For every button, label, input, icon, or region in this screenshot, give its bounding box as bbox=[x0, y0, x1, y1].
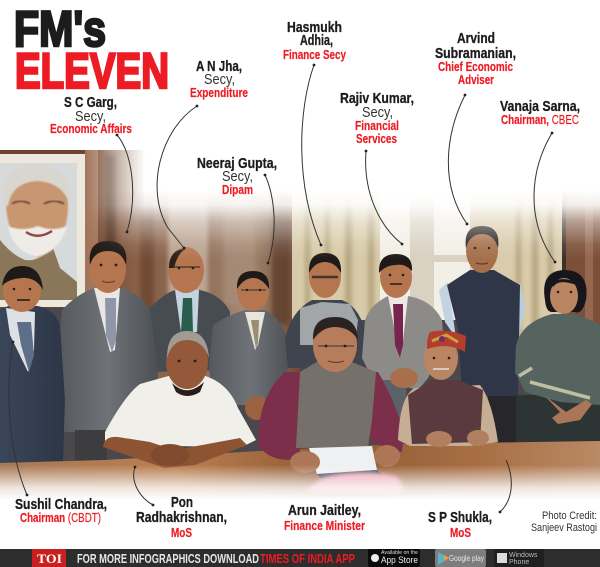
TOI logo bbox=[32, 549, 66, 567]
portrait of Modi bbox=[0, 150, 98, 308]
head bbox=[166, 335, 208, 389]
App Store badge bbox=[368, 549, 420, 567]
scarf bbox=[515, 314, 600, 405]
label: Rajiv Kumar: Services bbox=[356, 131, 397, 146]
label: Pon Radhakrishnan: MoS bbox=[171, 525, 192, 540]
Windows Phone badge: Windows bbox=[509, 552, 538, 559]
label: Arvind Subramanian: Subramanian, bbox=[435, 46, 516, 62]
fade bottom bbox=[0, 465, 600, 500]
flowers bbox=[307, 472, 403, 492]
hair bbox=[544, 270, 587, 312]
footer message: FOR MORE INFOGRAPHICS DOWNLOAD bbox=[77, 551, 259, 566]
label: Arvind Subramanian: Chief Economic bbox=[438, 59, 513, 74]
label: Sushil Chandra bbox=[15, 497, 107, 525]
document bbox=[309, 446, 377, 474]
label: S P Shukla bbox=[428, 510, 492, 540]
shirt bbox=[105, 375, 256, 447]
vest bbox=[296, 360, 376, 448]
trousers bbox=[488, 390, 518, 444]
face bbox=[6, 168, 68, 258]
label: S C Garg bbox=[50, 95, 132, 136]
wood wall left bbox=[85, 150, 300, 380]
wood panel stripes bbox=[106, 155, 290, 365]
smile bbox=[26, 231, 52, 236]
label: Rajiv Kumar: Secy, bbox=[362, 105, 393, 121]
fade top bbox=[88, 150, 600, 254]
label: Arun Jaitley: Arun Jaitley, bbox=[288, 503, 361, 519]
Hasmukh Adhia bbox=[285, 253, 367, 368]
tie bbox=[181, 298, 193, 332]
stripes bbox=[519, 368, 590, 398]
forearms bbox=[103, 437, 247, 468]
curtain centre-left bbox=[292, 150, 382, 320]
App Store badge: App Store bbox=[381, 555, 418, 565]
window bbox=[380, 150, 470, 320]
cap bbox=[427, 331, 466, 352]
label: Vanaja Sarna bbox=[500, 99, 580, 127]
frame bbox=[0, 150, 98, 308]
label: Arvind Subramanian bbox=[435, 31, 516, 87]
arms bbox=[544, 395, 592, 424]
TOI logo: TOI bbox=[37, 551, 62, 566]
label: Hasmukh Adhia: Adhia, bbox=[300, 33, 333, 49]
shirt and tie bbox=[6, 308, 35, 372]
label: S P Shukla: MoS bbox=[450, 525, 471, 540]
white hair bbox=[3, 164, 70, 206]
label: Hasmukh Adhia: Finance Secy bbox=[283, 47, 347, 62]
label: A N Jha: A N Jha, bbox=[196, 59, 242, 75]
coat bbox=[0, 240, 77, 300]
beige kurta bbox=[398, 385, 498, 446]
label: A N Jha: Secy, bbox=[204, 72, 235, 88]
Sushil Chandra bbox=[0, 266, 65, 463]
Windows Phone badge: Phone bbox=[509, 559, 529, 566]
label: Sushil Chandra: Chairman (CBDT) bbox=[20, 510, 101, 525]
leader lines bbox=[9, 64, 556, 513]
curtain folds bbox=[305, 155, 553, 335]
shirt and tie bbox=[245, 312, 265, 350]
Arvind Subramanian bbox=[439, 226, 525, 444]
title bbox=[14, 1, 169, 99]
shirt and tie bbox=[388, 296, 408, 358]
window bars bbox=[410, 150, 470, 320]
clasped hands bbox=[151, 444, 189, 466]
label: Neeraj Gupta: Secy, bbox=[222, 169, 253, 185]
lower background bbox=[0, 300, 600, 465]
vest bbox=[447, 270, 520, 396]
head bbox=[424, 336, 458, 380]
label: S P Shukla: S P Shukla, bbox=[428, 510, 492, 526]
label: Arvind Subramanian: Arvind bbox=[457, 31, 495, 47]
title line 2: ELEVEN bbox=[15, 43, 169, 99]
S P Shukla bbox=[398, 331, 498, 447]
label: Neeraj Gupta: Neeraj Gupta, bbox=[197, 156, 277, 172]
label: Arvind Subramanian: Adviser bbox=[458, 72, 494, 87]
group photo bbox=[0, 130, 600, 500]
label: S C Garg: Economic Affairs bbox=[50, 121, 132, 136]
hand bbox=[245, 396, 269, 420]
A N Jha bbox=[148, 247, 230, 372]
footer bar bbox=[0, 549, 600, 567]
label: Neeraj Gupta bbox=[197, 156, 277, 197]
photo credit bbox=[531, 510, 597, 534]
head bbox=[313, 318, 357, 372]
hands bbox=[374, 445, 400, 467]
mask above photo bbox=[0, 130, 600, 150]
Google Play badge bbox=[435, 549, 486, 567]
Rajiv Kumar bbox=[362, 254, 444, 420]
glasses and eyes bbox=[12, 201, 64, 204]
vest bbox=[300, 302, 358, 345]
label: Rajiv Kumar: Financial bbox=[355, 118, 399, 133]
label: A N Jha: Expenditure bbox=[190, 85, 248, 100]
label: A N Jha bbox=[190, 59, 248, 100]
label: Vanaja Sarna: Vanaja Sarna, bbox=[500, 99, 580, 115]
Windows Phone badge bbox=[494, 549, 544, 567]
dark skirt bbox=[516, 395, 600, 444]
label: Rajiv Kumar bbox=[340, 91, 414, 146]
hands bbox=[390, 368, 418, 388]
label: Arun Jaitley bbox=[284, 503, 365, 533]
label: Sushil Chandra: Sushil Chandra, bbox=[15, 497, 107, 513]
Arun Jaitley bbox=[258, 317, 404, 478]
label: Arun Jaitley: Finance Minister bbox=[284, 518, 365, 533]
footer brand: TIMES OF INDIA APP bbox=[260, 551, 355, 566]
label: Pon Radhakrishnan bbox=[136, 495, 227, 540]
S C Garg bbox=[58, 241, 158, 462]
curtain right bbox=[470, 150, 562, 350]
label: Hasmukh Adhia bbox=[283, 20, 347, 62]
trousers bbox=[380, 380, 406, 420]
wood wall right bbox=[562, 150, 600, 350]
label: Hasmukh Adhia: Hasmukh bbox=[287, 20, 342, 36]
shirt and tie bbox=[94, 288, 120, 352]
Google Play badge: Google play bbox=[449, 554, 484, 563]
label: Rajiv Kumar: Rajiv Kumar, bbox=[340, 91, 414, 107]
label: S C Garg: Secy, bbox=[75, 109, 106, 125]
label: Pon Radhakrishnan: Radhakrishnan, bbox=[136, 510, 227, 526]
App Store badge: Available on the bbox=[381, 550, 418, 556]
Vanaja Sarna bbox=[515, 270, 600, 444]
legs bbox=[75, 430, 107, 462]
hands bbox=[426, 431, 452, 447]
shirt sleeves bbox=[439, 282, 456, 338]
label: S C Garg: S C Garg, bbox=[64, 95, 117, 111]
Neeraj Gupta bbox=[209, 271, 292, 420]
Pon Radhakrishnan bbox=[103, 331, 256, 468]
maroon sleeves bbox=[258, 372, 300, 460]
vest bbox=[408, 380, 483, 444]
shirt bbox=[175, 290, 199, 332]
face bbox=[550, 278, 578, 314]
label: Neeraj Gupta: Dipam bbox=[222, 182, 253, 197]
white beard bbox=[8, 226, 67, 257]
table bbox=[0, 441, 600, 500]
label: Vanaja Sarna: Chairman, CBEC bbox=[501, 112, 579, 127]
title line 1: FM's bbox=[14, 1, 106, 57]
label: Pon Radhakrishnan: Pon bbox=[171, 495, 193, 511]
